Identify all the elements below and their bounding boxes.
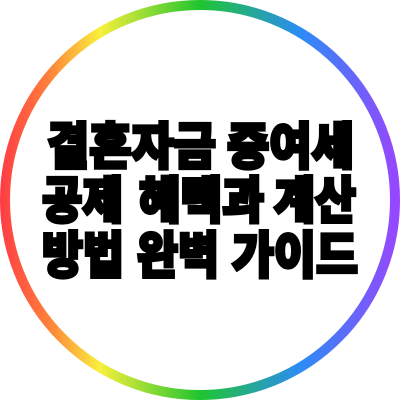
title line 3 bbox=[42, 228, 358, 284]
title line 1: 증여세 bbox=[227, 119, 354, 175]
title bbox=[42, 119, 358, 284]
title line 2: 공제 bbox=[42, 173, 123, 229]
title line 3: 가이드 bbox=[232, 228, 358, 284]
title line 2: 계산 bbox=[274, 173, 356, 229]
title line 2: 혜택과 bbox=[139, 173, 264, 229]
title line 3: 방법 bbox=[42, 228, 124, 284]
title line 3: 완벽 bbox=[137, 228, 219, 284]
title line 1: 결혼자금 bbox=[47, 119, 216, 175]
title line 2 bbox=[42, 173, 356, 229]
title line 1 bbox=[47, 119, 354, 175]
